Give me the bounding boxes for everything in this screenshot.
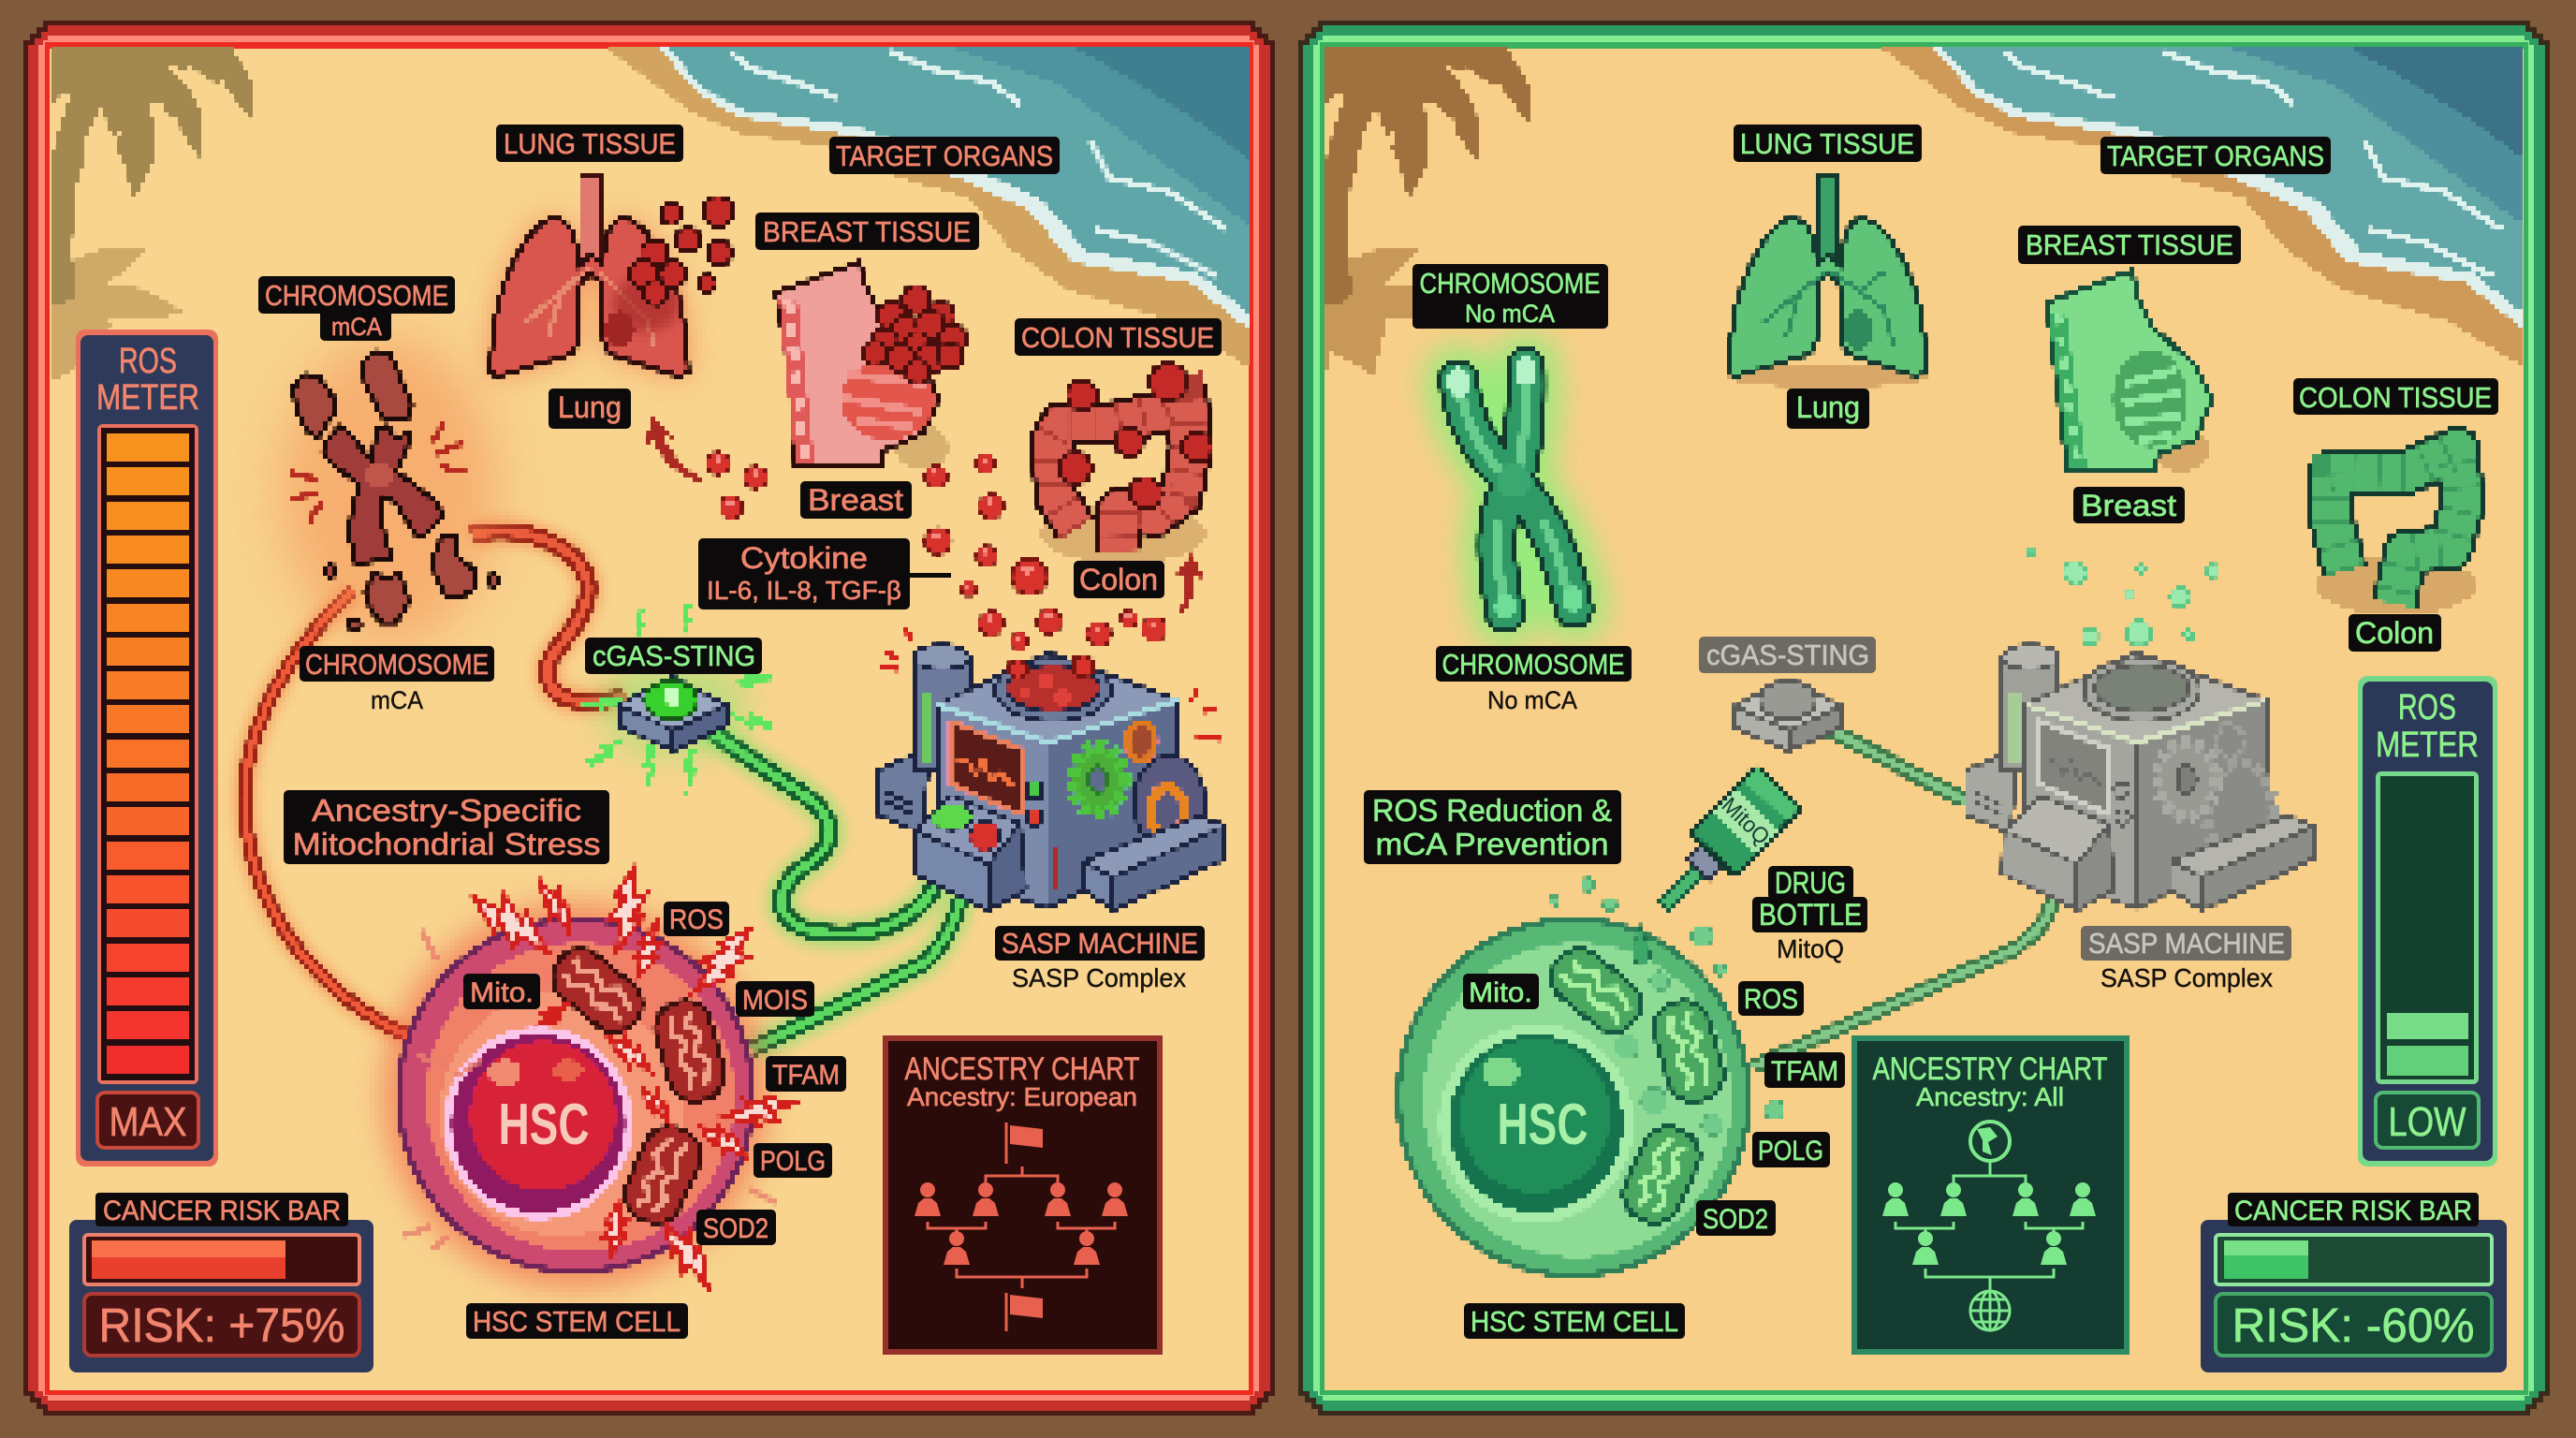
nucleus [444, 1027, 633, 1220]
label: CHROMOSOME bottom right: CHROMOSOME [1442, 648, 1625, 681]
artwork left [50, 49, 1249, 1293]
label: Cytokine: IL-6, IL-8, TGF-β [707, 576, 901, 605]
cancer risk bar left: RISK: +75% [99, 1299, 344, 1352]
label: TARGET ORGANS: TARGET ORGANS [836, 139, 1053, 172]
cancer risk bar right: RISK: -60% [2232, 1299, 2475, 1352]
SASP machine left [877, 645, 1225, 910]
label: Breast: Breast [808, 483, 903, 517]
arrow to colon [1174, 554, 1206, 620]
label: MOIS: MOIS [742, 985, 808, 1016]
ROS meter left: ROS [119, 342, 177, 381]
ROS meter right [2358, 676, 2497, 1167]
label: HSC STEM CELL: HSC STEM CELL [473, 1305, 681, 1338]
label: ROS right: ROS [1744, 984, 1798, 1015]
lung healthy [1727, 175, 1929, 388]
label: POLG right: POLG [1758, 1136, 1823, 1167]
label: Lung [549, 389, 631, 429]
ROS meter right: ROS [2398, 688, 2456, 727]
label: BREAST TISSUE right: BREAST TISSUE [2026, 228, 2233, 261]
label: DRUG BOTTLE: BOTTLE [1759, 898, 1862, 932]
ROS bolts [468, 867, 792, 1293]
colon healthy [2317, 449, 2476, 615]
text: SASP Complex: SASP Complex [1012, 963, 1186, 992]
label: Cytokine [698, 538, 951, 609]
label: DRUG BOTTLE: DRUG [1775, 866, 1846, 900]
label: Colon right: Colon [2355, 616, 2434, 650]
faint sparks [404, 930, 777, 1250]
panel: left, with mCA [23, 21, 1275, 1416]
green tube: cGAS to SASP [706, 728, 942, 933]
ancestry chart right: ANCESTRY CHART [1872, 1051, 2108, 1087]
label: Lung right: Lung [1796, 390, 1860, 424]
label: SASP MACHINE inactive: SASP MACHINE [2088, 927, 2285, 960]
label: SOD2 right: SOD2 [1703, 1204, 1768, 1235]
label: Ancestry-Specific Mitochondrial Stress: Mitochondrial Stress [292, 827, 601, 861]
label: ROS: ROS [669, 904, 724, 935]
cancer risk bar right [2201, 1193, 2507, 1372]
label: Breast [800, 481, 912, 519]
artwork right [1325, 49, 2524, 1275]
label: Mito.: Mito. [470, 977, 534, 1008]
label: Lung right [1787, 389, 1869, 429]
label: Colon: Colon [1079, 563, 1158, 596]
HSC cell left [384, 867, 792, 1293]
label: BREAST TISSUE: BREAST TISSUE [763, 215, 971, 248]
nucleus right [1449, 1034, 1623, 1212]
label: COLON TISSUE right: COLON TISSUE [2299, 381, 2492, 414]
mitochondria [542, 939, 731, 1231]
label: CHROMOSOME mCA top: mCA [331, 313, 382, 341]
SASP machine inactive [1966, 645, 2314, 910]
label: POLG: POLG [760, 1146, 826, 1177]
label: CHROMOSOME mCA top [258, 276, 455, 341]
cGAS-STING device left [574, 605, 774, 796]
label: Ancestry-Specific Mitochondrial Stress: Ancestry-Specific [312, 793, 581, 828]
cancer risk bar left: CANCER RISK BAR [103, 1196, 341, 1226]
colon diseased, left [1041, 363, 1212, 564]
label: Mito. [463, 974, 540, 1009]
text: No mCA: No mCA [1487, 686, 1577, 714]
bubbles above SASP machine [2027, 548, 2218, 645]
label: Breast right: Breast [2081, 489, 2176, 522]
green tube: cell to SASP [752, 887, 964, 1049]
text: MitoQ on bottle: MitoQ [1717, 793, 1775, 850]
cancer risk bar right: CANCER RISK BAR [2234, 1196, 2472, 1226]
drop and antioxidant bubbles [1550, 878, 1784, 1136]
text: SASP Complex right: SASP Complex [2100, 963, 2273, 992]
label: CHROMOSOME No mCA top: CHROMOSOME [1419, 267, 1601, 300]
ancestry chart left [886, 1038, 1160, 1352]
chromosome broken, left [281, 337, 499, 646]
ROS meter left: METER [96, 378, 199, 418]
label: SASP MACHINE: SASP MACHINE [1002, 927, 1198, 960]
label: CHROMOSOME bottom: CHROMOSOME [305, 648, 489, 681]
beach scene right [1325, 49, 2524, 379]
ancestry chart left: Ancestry: European [907, 1082, 1137, 1111]
text: HSC right: HSC [1498, 1093, 1588, 1157]
panel: right, no mCA [1298, 21, 2550, 1416]
ROS meter left [76, 330, 218, 1167]
cGAS-STING device inactive [1734, 679, 1841, 751]
label: HSC STEM CELL right: HSC STEM CELL [1471, 1305, 1678, 1338]
text: MitoQ: MitoQ [1777, 934, 1844, 963]
label: LUNG TISSUE right: LUNG TISSUE [1740, 127, 1914, 160]
label: DRUG BOTTLE [1752, 866, 1867, 932]
red tube: cell to chromosome [244, 592, 406, 1035]
label: CHROMOSOME mCA top: CHROMOSOME [265, 279, 448, 312]
label: CHROMOSOME No mCA top: No mCA [1465, 300, 1555, 328]
cancer risk bar left [69, 1193, 373, 1372]
ancestry chart right: Ancestry: All [1916, 1082, 2064, 1111]
label: Mito. right [1463, 974, 1539, 1009]
label: SOD2: SOD2 [703, 1213, 768, 1244]
label: cGAS-STING inactive: cGAS-STING [1706, 638, 1869, 671]
text: HSC left: HSC [498, 1093, 590, 1157]
ROS meter right: LOW [2389, 1099, 2466, 1145]
beach scene left [50, 49, 1249, 379]
lung diseased, left [490, 175, 733, 376]
label: Mito. right: Mito. [1469, 977, 1532, 1008]
label: TFAM: TFAM [772, 1060, 840, 1091]
ROS meter left: MAX [109, 1099, 187, 1145]
ancestry chart left: ANCESTRY CHART [904, 1051, 1140, 1087]
label: Lung: Lung [558, 390, 622, 424]
tube: cell to SASP, inactive [1752, 884, 2056, 1067]
label: cGAS-STING: cGAS-STING [593, 639, 755, 672]
HSC cell right [1398, 878, 1784, 1275]
breast healthy [2047, 271, 2212, 472]
label: ROS Reduction and mCA Prevention: mCA Prevention [1376, 827, 1608, 861]
label: ROS Reduction and mCA Prevention: ROS Reduction & [1372, 793, 1612, 828]
label: ROS Reduction and mCA Prevention [1364, 790, 1621, 864]
chromosome healthy [1447, 356, 1584, 619]
ancestry chart right [1854, 1038, 2127, 1352]
alarm sparks on machine [880, 625, 1222, 740]
text: mCA: mCA [371, 686, 423, 714]
label: TFAM right: TFAM [1771, 1056, 1838, 1087]
drug bottle [1642, 766, 1800, 927]
label: Ancestry-Specific Mitochondrial Stress [284, 790, 609, 864]
red tube: chromosome to cGAS-STING [472, 532, 625, 701]
ROS meter right: METER [2376, 726, 2479, 765]
label: LUNG TISSUE: LUNG TISSUE [504, 127, 676, 160]
cytokine particles left [707, 452, 1166, 650]
tube: cGAS to SASP, inactive [1827, 728, 1965, 800]
label: CHROMOSOME No mCA top [1412, 264, 1608, 329]
arrow to lung [644, 416, 706, 483]
label: TARGET ORGANS right: TARGET ORGANS [2107, 139, 2324, 172]
label: Cytokine: Cytokine [740, 541, 868, 575]
breast diseased, left [776, 262, 967, 470]
label: COLON TISSUE: COLON TISSUE [1021, 321, 1214, 354]
mitochondria right [1541, 939, 1730, 1231]
